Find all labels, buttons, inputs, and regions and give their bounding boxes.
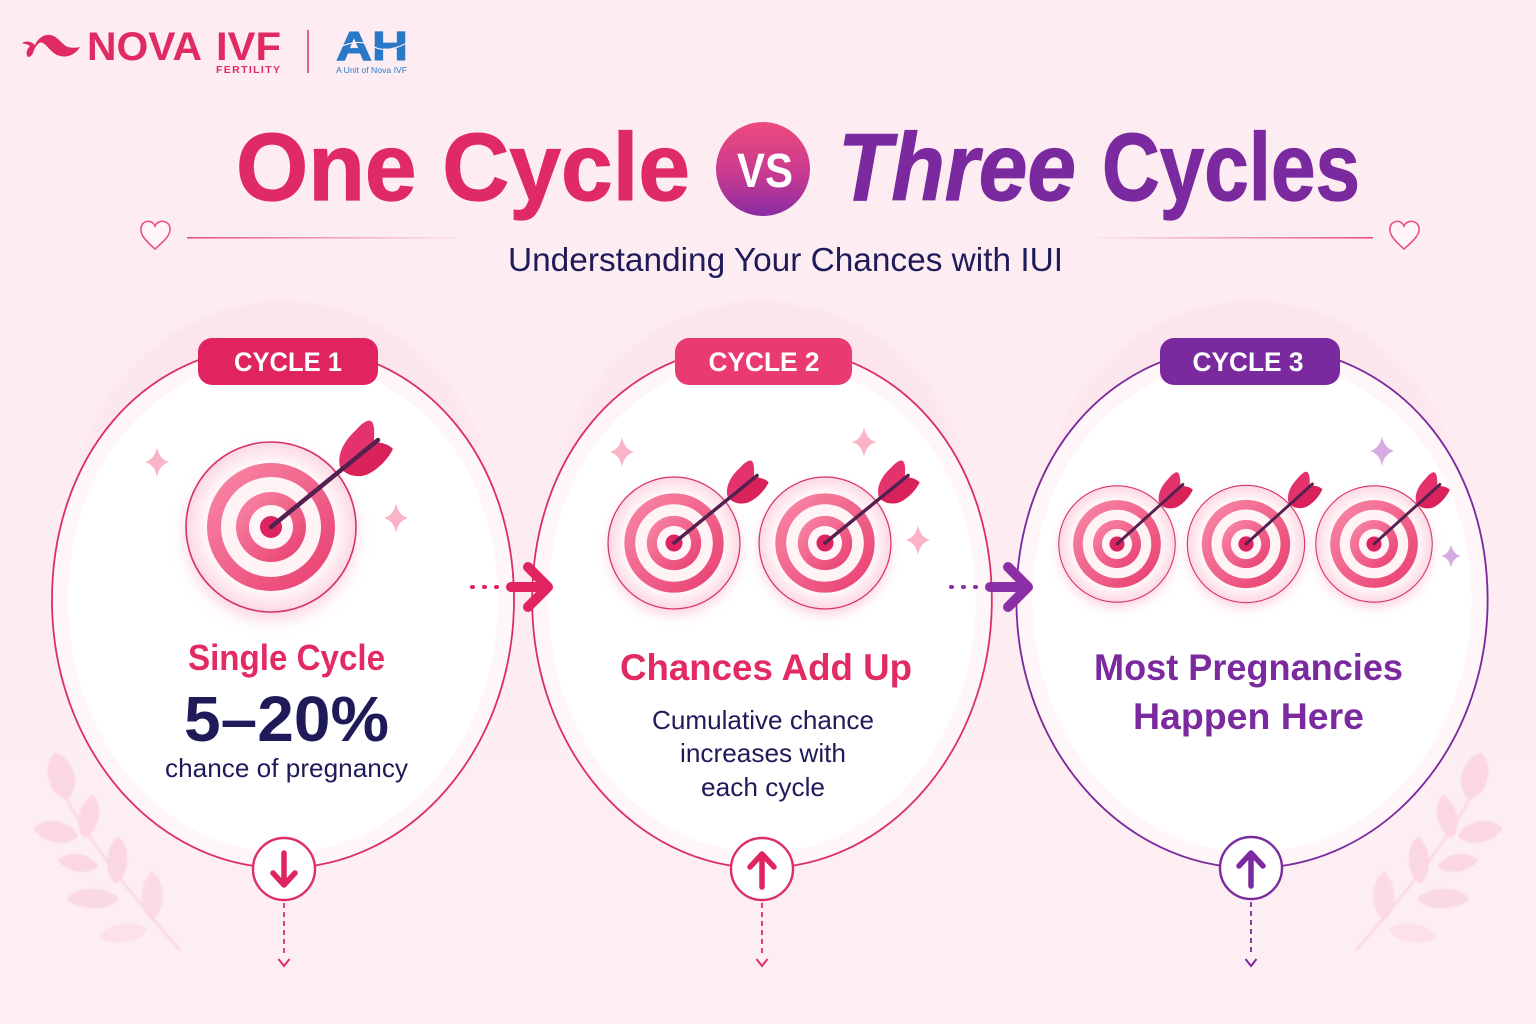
halos behind panels [75, 302, 1460, 718]
icon: target b [1187, 471, 1325, 607]
stat label: chance of pregnancy [165, 753, 408, 783]
heading: Happen Here [1133, 696, 1364, 737]
title: cycles: Cycles [1102, 114, 1360, 221]
panel: cycle 2 [532, 345, 992, 868]
logo divider [307, 30, 309, 73]
badge: cycle 1: CYCLE 1 [234, 347, 342, 377]
icon: down arrow circle [253, 838, 315, 900]
logo: AH: A Unit of Nova IVF [336, 65, 407, 75]
body text: Cumulative chance [652, 705, 874, 735]
logo: AH: AH [336, 23, 408, 69]
panel: cycle 3 [1016, 345, 1488, 868]
icon: target a [608, 460, 769, 614]
body text: increases with [680, 738, 846, 768]
logo: Nova IVF: IVF [216, 25, 281, 69]
heading: Chances Add Up [620, 647, 912, 688]
icon: up arrow circle 2 [731, 838, 793, 900]
subtitle: Understanding Your Chances with IUI [508, 241, 1063, 278]
arrow: cycle 2 to 3 [951, 567, 1028, 607]
heading: Most Pregnancies [1094, 647, 1403, 688]
divider left [187, 237, 472, 239]
badge: cycle 2 [675, 338, 852, 385]
sparkles [1370, 436, 1461, 568]
panel: cycle 1 [52, 345, 514, 868]
dashed arrow 2 [756, 903, 768, 966]
sparkles [610, 427, 930, 555]
icon: up arrow circle 3 [1220, 837, 1282, 899]
logo: Nova IVF: NOVA [87, 25, 202, 69]
icon: heart left [141, 221, 170, 249]
badge: cycle 3 [1160, 338, 1340, 385]
icon: target [186, 421, 393, 619]
arrow: cycle 1 to 2 [472, 567, 548, 607]
decorative leaves left [32, 749, 180, 950]
badge: cycle 3: CYCLE 3 [1192, 347, 1304, 377]
heading [1094, 647, 1403, 737]
title: three: Three [838, 114, 1076, 221]
vs badge: VS [737, 145, 793, 198]
logo: Nova IVF [22, 25, 281, 76]
decorative leaves right [1356, 749, 1504, 950]
title: one cycle: One Cycle [236, 114, 690, 221]
dashed arrow 3 [1246, 902, 1256, 966]
dashed arrow 1 [278, 903, 290, 966]
logo: Nova IVF: FERTILITY [216, 64, 280, 76]
icon: heart right [1390, 221, 1419, 249]
title [236, 114, 1360, 221]
heading: Single Cycle [188, 637, 385, 678]
badge: cycle 2: CYCLE 2 [708, 347, 820, 377]
body text: each cycle [701, 772, 825, 802]
badge: cycle 1 [198, 338, 378, 385]
icon: target c [1316, 472, 1452, 607]
icon: target b [759, 460, 920, 614]
icon: target a [1059, 472, 1195, 607]
divider right [1085, 237, 1373, 239]
vs badge [716, 122, 810, 216]
body text [652, 705, 874, 802]
sparkles [145, 447, 408, 533]
stat: 5–20% [184, 683, 389, 755]
